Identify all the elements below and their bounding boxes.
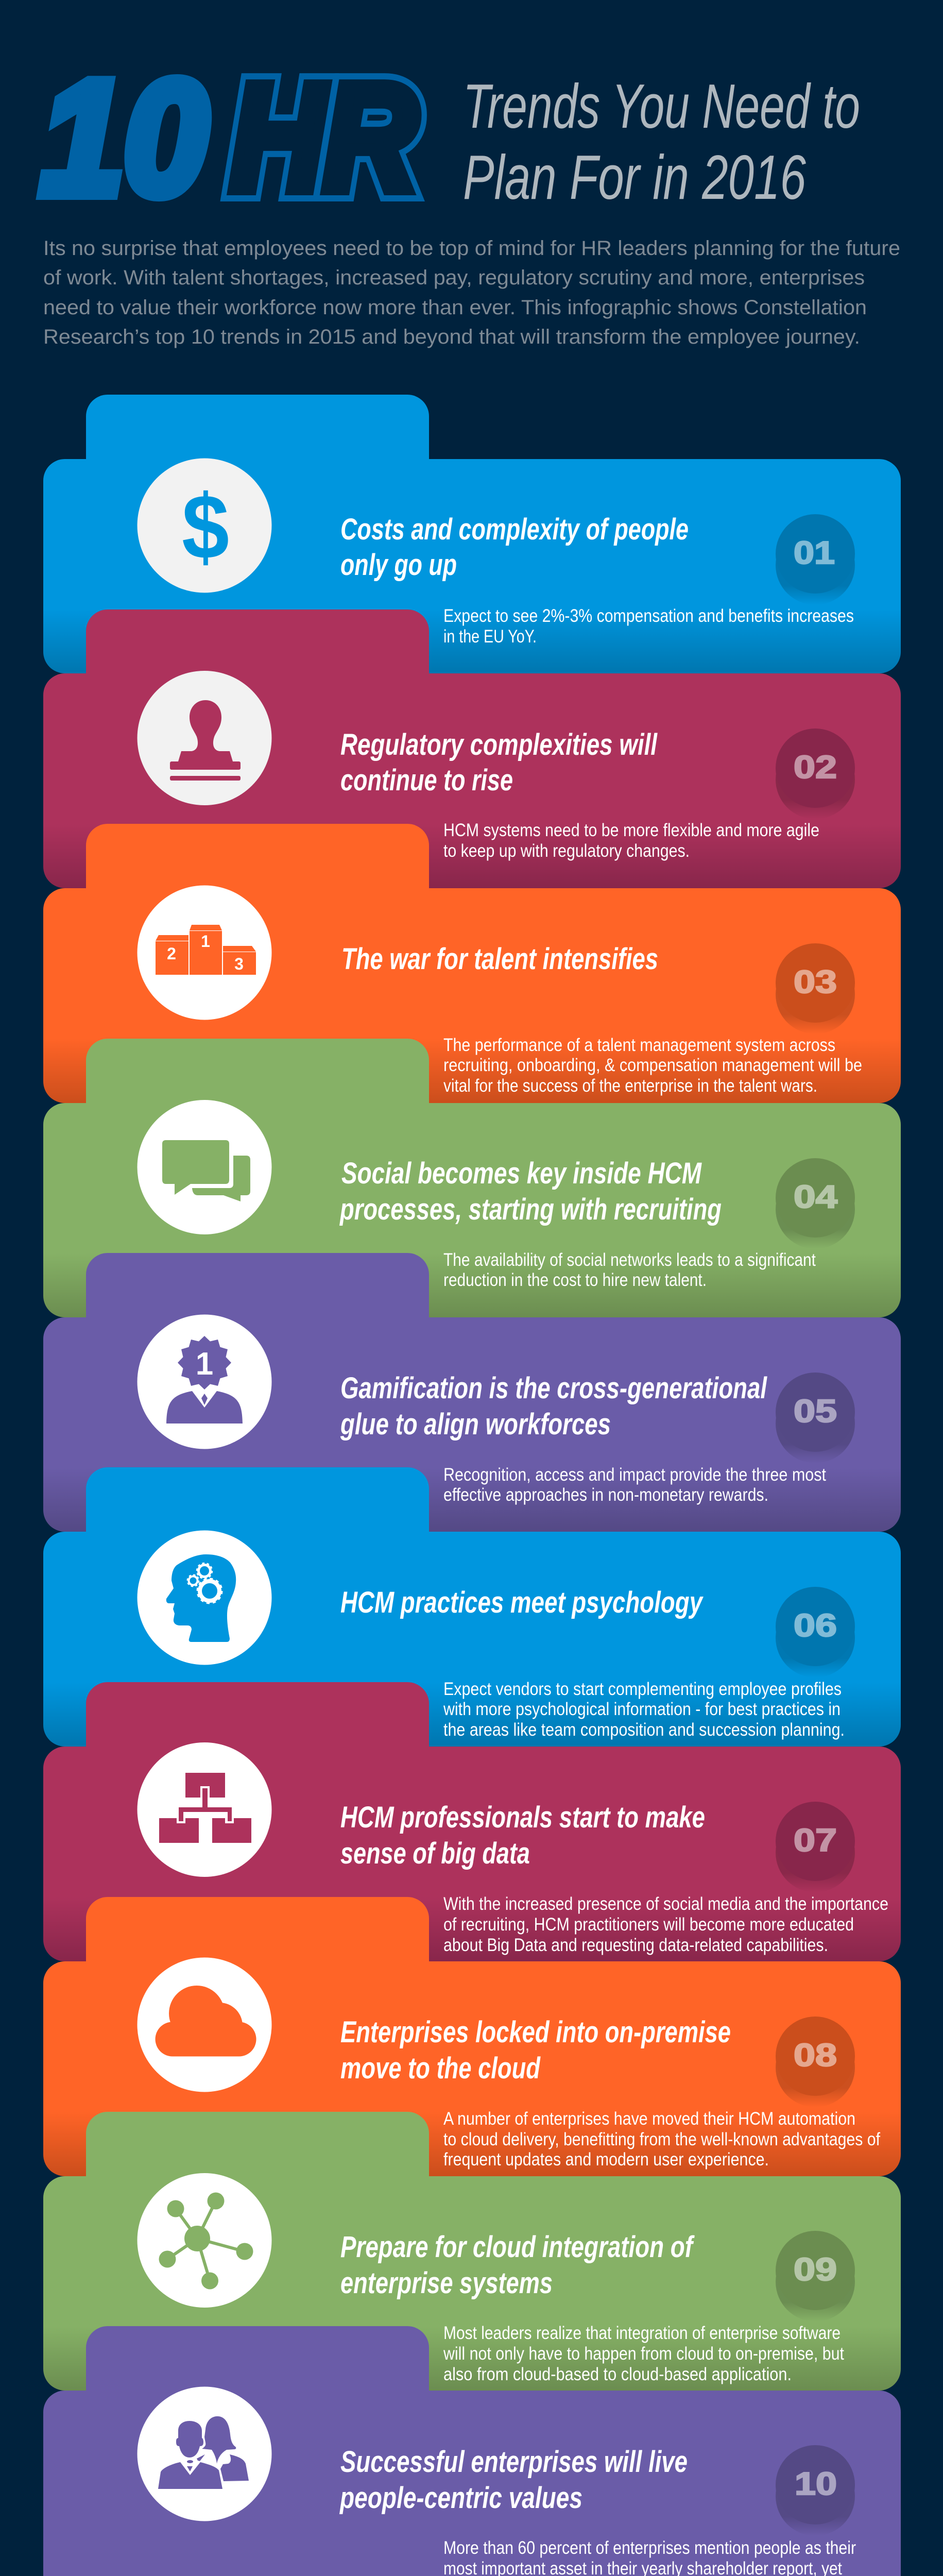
heading: [340, 2230, 695, 2300]
panel shape: [43, 1039, 901, 1317]
icon: hierarchy: [137, 1742, 272, 1877]
heading: Gamification is the cross-generational: [340, 1371, 767, 1405]
description: [443, 606, 854, 647]
heading: [339, 2445, 688, 2515]
number badge: [776, 1587, 855, 1677]
panel shape: [43, 395, 901, 673]
number badge: [776, 2231, 855, 2321]
number badge: 02: [794, 750, 837, 785]
heading: enterprise systems: [340, 2266, 553, 2300]
title: subtitle: Plan For in 2016: [463, 142, 806, 212]
description: the areas like team composition and succession planning.: [443, 1720, 845, 1740]
heading: [340, 728, 658, 797]
number badge: [776, 1372, 855, 1463]
number badge: [776, 1158, 855, 1249]
description: Most leaders realize that integration of enterprise software: [443, 2323, 841, 2343]
heading: only go up: [340, 548, 457, 582]
number badge: 06: [794, 1608, 837, 1643]
intro text: of work. With talent shortages, increased pay, regulatory scrutiny and more, enterprises: [43, 266, 865, 289]
number badge: 09: [794, 2252, 837, 2287]
icon: network: [137, 2173, 272, 2308]
panel shape: [43, 609, 901, 888]
panel 03: talent: [43, 824, 901, 1103]
title: HR outlined: HR: [231, 53, 417, 221]
heading: [340, 513, 689, 582]
number badge: [776, 728, 855, 819]
description: Expect vendors to start complementing employee profiles: [443, 1679, 842, 1699]
number badge: [776, 943, 855, 1034]
description: [443, 1250, 816, 1290]
panel 02: regulatory: [43, 609, 901, 888]
panel shape: [43, 1897, 901, 2176]
description: The performance of a talent management system across: [443, 1035, 835, 1055]
heading: Prepare for cloud integration of: [340, 2230, 695, 2264]
heading: Regulatory complexities will: [340, 728, 658, 761]
icon: badge person: 1: [196, 1346, 213, 1382]
description: Recognition, access and impact provide the three most: [443, 1465, 826, 1485]
icon: badge person: [137, 1315, 272, 1449]
intro text: Research’s top 10 trends in 2015 and beyond that will transform the employee journey.: [43, 326, 860, 348]
description: [443, 1679, 845, 1740]
intro text: Its no surprise that employees need to be top of mind for HR leaders planning for the future: [43, 237, 900, 260]
panel shape: [43, 1682, 901, 1961]
title: 10: 10: [40, 47, 208, 228]
number badge: 10: [795, 2466, 837, 2502]
panel 10: people-centric: [43, 2326, 901, 2576]
description: vital for the success of the enterprise in the talent wars.: [443, 1076, 817, 1096]
number badge: 08: [794, 2038, 837, 2073]
description: [443, 2538, 856, 2576]
heading: [339, 1157, 722, 1226]
heading: The war for talent intensifies: [341, 942, 658, 976]
heading: Costs and complexity of people: [340, 513, 689, 546]
panel shape: [43, 2326, 901, 2576]
panel 09: integration: [43, 2112, 901, 2391]
title: [40, 47, 860, 228]
icon: head with gears: [137, 1530, 272, 1665]
description: to keep up with regulatory changes.: [443, 841, 690, 861]
number badge: 01: [794, 535, 835, 571]
heading: HCM practices meet psychology: [340, 1586, 704, 1619]
panel shape: [43, 2112, 901, 2391]
icon: podium: 2: [167, 944, 176, 963]
description: Expect to see 2%-3% compensation and benefits increases: [443, 606, 854, 626]
description: [443, 1465, 826, 1505]
description: HCM systems need to be more flexible and more agile: [443, 820, 819, 840]
heading: sense of big data: [340, 1837, 530, 1870]
heading: [340, 2015, 731, 2085]
title: subtitle: [463, 71, 860, 212]
heading: [340, 1801, 705, 1870]
icon: podium: 1: [201, 932, 210, 951]
number badge: [776, 1802, 855, 1892]
heading: Social becomes key inside HCM: [341, 1157, 702, 1190]
panel 05: gamification: [43, 1253, 901, 1532]
panel 01: costs: [43, 395, 901, 673]
panel 04: social: [43, 1039, 901, 1317]
description: about Big Data and requesting data-related capabilities.: [443, 1935, 828, 1955]
panel 08: cloud: [43, 1897, 901, 2176]
description: With the increased presence of social media and the importance: [443, 1894, 888, 1914]
description: in the EU YoY.: [443, 626, 537, 647]
number badge: 07: [794, 1823, 837, 1858]
number badge: 05: [794, 1394, 837, 1429]
icon: dollar: [137, 459, 272, 592]
number badge: 03: [794, 964, 837, 1000]
heading: move to the cloud: [340, 2052, 541, 2085]
description: frequent updates and modern user experience.: [443, 2149, 769, 2170]
icon: podium: 3: [234, 955, 244, 973]
description: [443, 2109, 880, 2170]
heading: HCM professionals start to make: [340, 1801, 705, 1834]
description: will not only have to happen from cloud to on-premise, but: [443, 2344, 844, 2364]
description: with more psychological information - for best practices in: [443, 1699, 841, 1719]
number badge: [776, 2016, 855, 2107]
icon: podium: [137, 885, 272, 1020]
description: More than 60 percent of enterprises mention people as their: [443, 2538, 856, 2558]
panel 06: psychology: [43, 1467, 901, 1747]
intro text: need to value their workforce now more than ever. This infographic shows Constellation: [43, 296, 867, 319]
description: of recruiting, HCM practitioners will become more educated: [443, 1914, 854, 1935]
icon: chat bubbles: [137, 1100, 272, 1234]
number badge: [776, 2445, 855, 2536]
description: effective approaches in non-monetary rewards.: [443, 1485, 768, 1505]
description: [443, 2323, 844, 2384]
icon: cloud: [137, 1958, 272, 2092]
panel 07: big data: [43, 1682, 901, 1961]
heading: processes, starting with recruiting: [339, 1193, 722, 1226]
description: The availability of social networks leads to a significant: [443, 1250, 816, 1270]
icon: dollar: $: [182, 476, 229, 578]
number badge: 04: [794, 1179, 838, 1215]
heading: glue to align workforces: [340, 1408, 611, 1441]
heading: continue to rise: [340, 764, 513, 797]
icon: people: [137, 2386, 272, 2521]
description: recruiting, onboarding, & compensation management will be: [443, 1055, 862, 1075]
description: [443, 820, 819, 861]
icon: stamp: [137, 671, 272, 805]
intro text: [43, 237, 900, 348]
heading: people-centric values: [339, 2481, 582, 2515]
heading: Successful enterprises will live: [340, 2445, 688, 2479]
panel shape: [43, 824, 901, 1103]
description: A number of enterprises have moved their HCM automation: [443, 2109, 855, 2129]
heading: Enterprises locked into on-premise: [340, 2015, 731, 2049]
description: [443, 1035, 862, 1096]
description: reduction in the cost to hire new talent.: [443, 1270, 707, 1290]
panel shape: [43, 1253, 901, 1532]
panel shape: [43, 1467, 901, 1747]
number badge: [776, 514, 855, 605]
description: [443, 1894, 888, 1955]
description: also from cloud-based to cloud-based application.: [443, 2364, 792, 2384]
heading: [340, 1371, 767, 1441]
title: HR outlined: HR: [231, 53, 417, 221]
description: to cloud delivery, benefitting from the well-known advantages of: [443, 2129, 880, 2149]
